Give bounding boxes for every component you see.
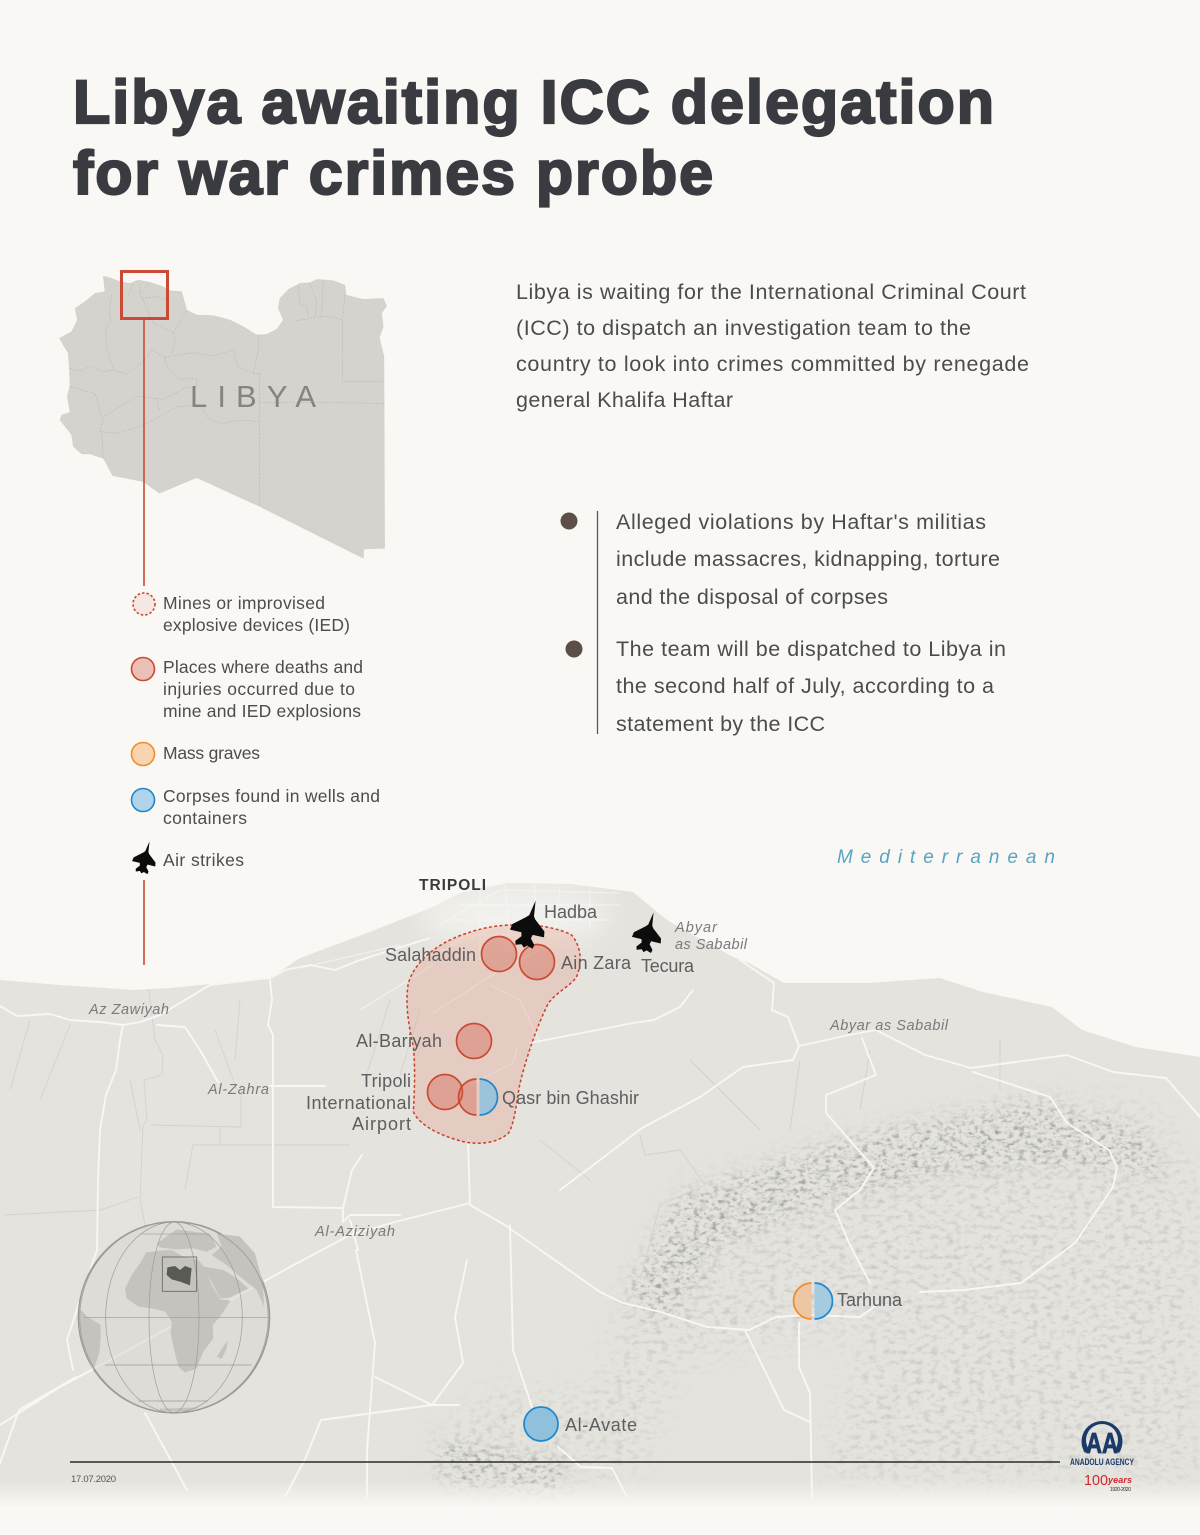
legend — [130, 593, 380, 876]
title: for war crimes probe — [73, 139, 713, 207]
mine zone — [407, 925, 580, 1143]
intro text — [516, 280, 1029, 412]
place labels: Al-Aziziyah — [314, 1224, 395, 1240]
legend: mines: explosive devices (IED) — [163, 615, 350, 635]
place labels: Hadba — [544, 902, 598, 922]
point 1 text: include massacres, kidnapping, torture — [616, 547, 1000, 571]
intro text: Libya is waiting for the International Criminal Court — [516, 280, 1026, 304]
Tarhuna marker — [794, 1283, 832, 1319]
LIBYA label: LIBYA — [190, 379, 316, 414]
point 2 text: the second half of July, according to a — [616, 674, 994, 698]
point 2 text — [616, 637, 1006, 736]
place labels: Abyar as Sababil — [829, 1018, 949, 1034]
place labels: Tripoli — [361, 1071, 411, 1091]
bullet 2 — [566, 640, 582, 658]
district borders — [70, 280, 385, 507]
key points — [560, 510, 1006, 736]
graticule — [80, 1222, 268, 1413]
Tripoli urban roads — [300, 885, 700, 1085]
Ain Zara marker — [520, 944, 554, 980]
place labels: Salahaddin — [385, 945, 476, 965]
Libya silhouette — [59, 276, 387, 558]
Al-Bariyah marker — [456, 1024, 492, 1058]
bottom paper — [0, 1508, 1200, 1535]
intro text: (ICC) to dispatch an investigation team to the — [516, 316, 971, 340]
legend: deaths and injuries: Places where deaths and — [163, 657, 363, 677]
bullet 1 — [560, 512, 578, 530]
place labels: TRIPOLI — [419, 877, 486, 894]
globe inset — [78, 1222, 270, 1413]
title — [73, 68, 994, 207]
place labels: Tarhuna — [837, 1290, 903, 1310]
legend: deaths and injuries: injuries occurred due to — [163, 679, 355, 699]
legend: mines: Mines or improvised — [163, 593, 325, 613]
legend: mines — [133, 593, 350, 635]
legend: mass graves — [132, 742, 260, 766]
Anadolu Agency logo: AA — [1086, 1428, 1118, 1460]
terrain map base — [0, 883, 1200, 1500]
legend: mass graves: Mass graves — [163, 743, 260, 763]
place labels: Al-Avate — [565, 1415, 637, 1435]
Qasr bin Ghashir marker arc — [480, 1079, 498, 1115]
jet over Tecura — [629, 909, 667, 955]
Anadolu Agency logo: 1920-2020 — [1110, 1487, 1131, 1493]
Qasr bin Ghashir marker left half — [459, 1079, 476, 1115]
incident markers — [428, 936, 554, 1115]
Libya on globe — [167, 1266, 192, 1285]
legend: corpses: Corpses found in wells and — [163, 786, 380, 806]
place labels: Airport — [352, 1114, 411, 1134]
Anadolu Agency logo — [1070, 1421, 1134, 1493]
place labels: Az Zawiyah — [88, 1002, 169, 1018]
point 2 text: statement by the ICC — [616, 712, 825, 736]
locator square — [122, 272, 168, 318]
legend: deaths and injuries — [132, 657, 363, 721]
Salahaddin marker — [482, 936, 516, 972]
timeline rule — [596, 511, 598, 734]
title: Libya awaiting ICC delegation — [73, 68, 994, 136]
continents — [79, 1229, 264, 1411]
legend: corpses — [132, 786, 380, 828]
point 1 text — [616, 510, 1000, 609]
Anadolu Agency logo: ANADOLU AGENCY — [1070, 1457, 1134, 1467]
point 2 text: The team will be dispatched to Libya in — [616, 637, 1006, 661]
place labels: Qasr bin Ghashir — [502, 1088, 639, 1108]
place labels — [88, 877, 949, 1435]
intro text: general Khalifa Haftar — [516, 388, 733, 412]
Anadolu Agency logo: 100 — [1084, 1472, 1108, 1489]
leader line — [143, 319, 145, 965]
legend: corpses: containers — [163, 808, 247, 828]
place labels: Abyar — [674, 920, 718, 936]
point 1 text: Alleged violations by Haftar's militias — [616, 510, 986, 534]
footer rule — [70, 1461, 1060, 1463]
legend: air strikes: Air strikes — [163, 850, 244, 870]
legend: deaths and injuries: mine and IED explosions — [163, 701, 361, 721]
place labels: as Sababil — [675, 937, 748, 953]
locator map of Libya — [59, 272, 387, 965]
intro text: country to look into crimes committed by renegade — [516, 352, 1029, 376]
jet over Hadba — [507, 896, 552, 952]
place labels: Al-Zahra — [207, 1082, 269, 1098]
Anadolu Agency logo: years — [1107, 1475, 1132, 1485]
roads — [0, 938, 1200, 1497]
place labels: Ain Zara — [561, 953, 632, 973]
minor roads — [5, 985, 1000, 1280]
Airport marker — [428, 1074, 462, 1110]
sea label: Mediterranean — [837, 847, 1055, 868]
date: 17.07.2020 — [71, 1474, 116, 1485]
Qasr bin Ghashir marker right half — [480, 1079, 498, 1115]
place labels: International — [306, 1093, 411, 1113]
place labels: Al-Bariyah — [356, 1031, 442, 1051]
point 1 text: and the disposal of corpses — [616, 585, 888, 609]
legend: air strikes — [130, 839, 244, 876]
Al-Avate marker — [524, 1407, 558, 1441]
globe locator box — [162, 1257, 197, 1291]
globe sphere — [78, 1222, 270, 1413]
bottom fade — [0, 1480, 1200, 1508]
place labels: Tecura — [641, 956, 695, 976]
